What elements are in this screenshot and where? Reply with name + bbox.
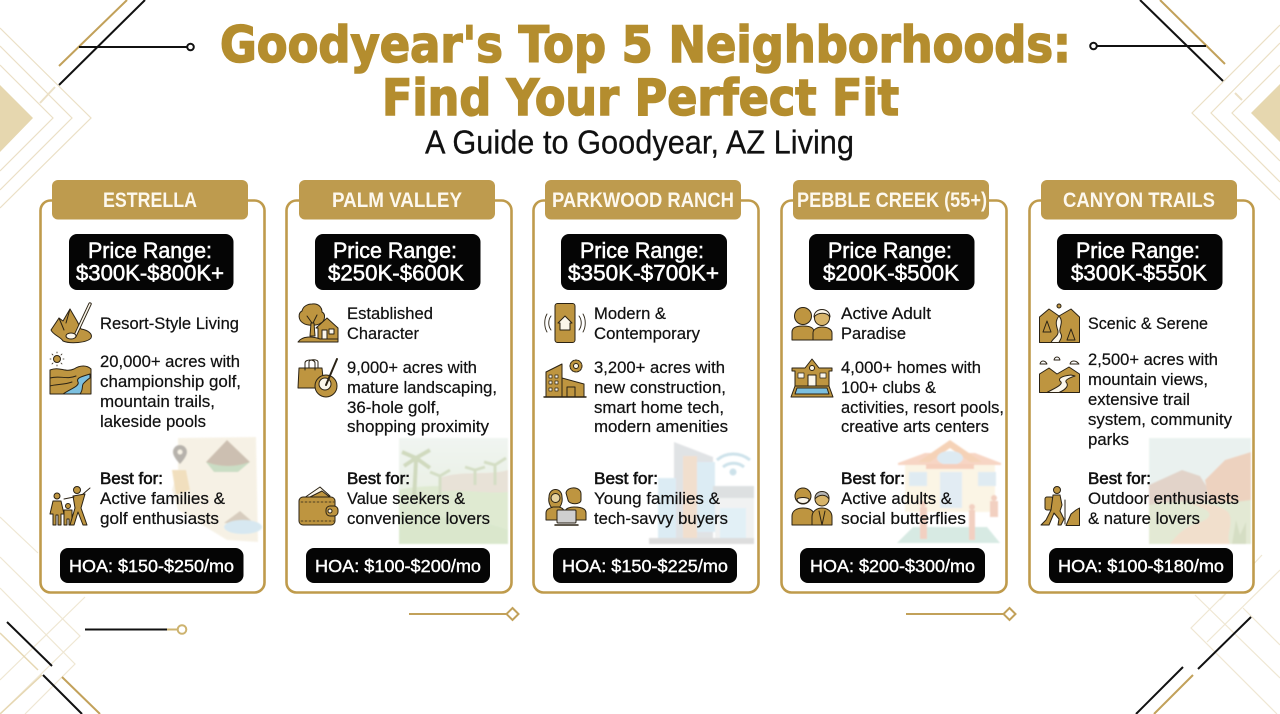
price range badge <box>69 234 234 290</box>
feature text: acreage and trails: parks <box>1088 430 1129 449</box>
best-for text: Active adults & <box>841 489 953 508</box>
HOA badge: HOA: $100-$180/mo <box>1058 556 1224 576</box>
feature text: homes and clubs: creative arts centers <box>841 417 989 436</box>
best-for text: Best for: <box>100 469 163 488</box>
best-for text: convenience lovers <box>347 509 490 528</box>
HOA badge <box>306 548 490 583</box>
heading pill: Canyon Trails: CANYON TRAILS <box>1063 188 1215 212</box>
best-for text <box>347 469 490 528</box>
HOA badge: HOA: $200-$300/mo <box>810 556 975 576</box>
title: Find Your Perfect Fit <box>382 69 899 127</box>
feature text: established character: Character <box>347 324 419 343</box>
price range badge: Price Range: <box>88 238 212 263</box>
best-for text: social butterflies <box>841 509 966 528</box>
illustration: clubhouse watermark <box>897 440 1001 543</box>
best-for text: Best for: <box>347 469 410 488</box>
best-for text: Young families & <box>594 489 721 508</box>
illustration: canyon landscape watermark <box>1149 438 1251 544</box>
icon: golfing family <box>50 486 90 525</box>
feature text: acreage and amenities: smart home tech, <box>594 398 724 417</box>
illustration: palm golf course watermark <box>399 438 508 544</box>
feature text: established character: Established <box>347 304 433 323</box>
icon: shopping bag and golf <box>298 359 337 397</box>
decoration: lower centre-left connector <box>409 608 518 620</box>
icon: wallet <box>299 487 338 525</box>
feature text: acreage and amenities: 3,200+ acres with <box>594 358 725 377</box>
feature text: acreage and amenities: mountain trails, <box>100 392 215 411</box>
feature text: modern and contemporary: Modern & <box>594 304 667 323</box>
best-for text: golf enthusiasts <box>100 509 219 528</box>
icon: golf mountains <box>51 304 91 343</box>
best-for text: Value seekers & <box>347 489 466 508</box>
icon: clouds and mountain path <box>1040 357 1080 392</box>
illustration: modern house with wifi watermark <box>649 442 754 544</box>
title <box>220 16 1071 127</box>
icon: tree and house <box>298 304 338 342</box>
decoration: bottom-right corner <box>1136 555 1280 714</box>
decoration: bottom-left corner <box>0 517 186 714</box>
feature text: acreage and amenities: lakeside pools <box>100 412 206 431</box>
feature text: active adult paradise <box>841 304 931 343</box>
feature text: acreage and amenities: shopping proximity <box>347 417 489 436</box>
best-for text: tech-savvy buyers <box>594 509 728 528</box>
heading pill: Palm Valley: PALM VALLEY <box>332 188 462 212</box>
price range badge: Price Range: <box>1076 238 1200 263</box>
HOA badge <box>60 548 244 583</box>
feature text: acreage and amenities: 20,000+ acres with <box>100 352 240 371</box>
feature text: homes and clubs: activities, resort pools, <box>841 398 1004 417</box>
best-for text <box>1088 469 1239 528</box>
decoration: lower centre-right connector <box>906 608 1016 620</box>
feature text: acreage and amenities: championship golf, <box>100 372 241 391</box>
icon: active adult couple <box>792 308 832 340</box>
icon: young couple with laptop <box>546 488 586 525</box>
heading pill: Estrella <box>52 180 248 220</box>
feature text: established character <box>347 304 433 343</box>
icon: scenic trail <box>1040 304 1080 342</box>
best-for text: Best for: <box>841 469 905 488</box>
feature text: acreage and amenities <box>100 352 241 431</box>
feature text: acreage and trails: 2,500+ acres with <box>1088 350 1218 369</box>
feature text: modern and contemporary: Contemporary <box>594 324 700 343</box>
feature text: acreage and amenities <box>347 358 497 436</box>
icon: clubhouse and pool <box>791 359 833 397</box>
heading pill: Pebble Creek: PEBBLE CREEK (55+) <box>797 188 987 212</box>
price range badge: $250K-$600K <box>328 260 464 286</box>
best-for text <box>841 469 966 528</box>
icon: smart home phone <box>545 304 585 342</box>
panel: Canyon Trails <box>1030 180 1254 592</box>
best-for text: Active families & <box>100 489 226 508</box>
heading pill: Parkwood Ranch <box>545 180 741 220</box>
HOA badge <box>1049 548 1233 583</box>
feature text: active adult paradise: Paradise <box>841 324 906 343</box>
price range badge: Price Range: <box>580 238 704 263</box>
feature text: acreage and amenities: 9,000+ acres with <box>347 358 477 377</box>
panel: Pebble Creek <box>782 180 1006 592</box>
decoration: top-left corner <box>0 0 194 208</box>
heading pill: Pebble Creek <box>793 180 989 220</box>
feature text: acreage and amenities: modern amenities <box>594 417 728 436</box>
HOA badge: HOA: $100-$200/mo <box>315 556 481 576</box>
feature text: acreage and amenities: mature landscaping, <box>347 378 497 397</box>
panel: Parkwood Ranch <box>534 180 758 592</box>
panel: Estrella <box>40 180 264 592</box>
best-for text: Best for: <box>594 469 658 488</box>
feature text: homes and clubs: 4,000+ homes with <box>841 358 981 377</box>
heading pill: Parkwood Ranch: PARKWOOD RANCH <box>552 188 734 212</box>
best-for text: Best for: <box>1088 469 1151 488</box>
icon: senior couple <box>792 488 832 525</box>
price range badge: $300K-$550K <box>1071 260 1207 286</box>
price range badge <box>809 234 974 290</box>
HOA badge: HOA: $150-$250/mo <box>69 556 234 576</box>
heading pill: Canyon Trails <box>1041 180 1237 220</box>
price range badge: $350K-$700K+ <box>568 260 719 286</box>
price range badge: $300K-$800K+ <box>76 260 224 286</box>
price range badge <box>1057 234 1222 290</box>
feature text: acreage and trails: system, community <box>1088 410 1232 429</box>
best-for text <box>594 469 728 528</box>
feature text: resort-style living: Resort-Style Living <box>100 314 239 333</box>
price range badge: Price Range: <box>828 238 952 263</box>
feature text: acreage and trails: extensive trail <box>1088 390 1190 409</box>
feature text: modern and contemporary <box>594 304 700 343</box>
feature text: homes and clubs: 100+ clubs & <box>841 378 937 397</box>
HOA badge <box>553 548 737 583</box>
best-for text: & nature lovers <box>1088 509 1200 528</box>
panel: Palm Valley <box>286 180 512 592</box>
best-for text: Outdoor enthusiasts <box>1088 489 1239 508</box>
feature text: scenic and serene: Scenic & Serene <box>1088 314 1208 333</box>
illustration: Arizona map watermark <box>172 437 262 542</box>
best-for text <box>100 469 226 528</box>
feature text: homes and clubs <box>841 358 1004 436</box>
feature text: acreage and trails: mountain views, <box>1088 370 1208 389</box>
price range badge: Price Range: <box>333 238 457 263</box>
icon: hiker <box>1041 486 1080 526</box>
HOA badge <box>800 548 985 583</box>
price range badge <box>315 234 480 290</box>
price range badge <box>561 234 727 290</box>
HOA badge: HOA: $150-$225/mo <box>562 556 728 576</box>
icon: modern buildings and gear <box>544 360 586 397</box>
feature text: acreage and amenities: new construction, <box>594 378 726 397</box>
feature text: acreage and amenities: 36-hole golf, <box>347 398 440 417</box>
heading pill: Estrella: ESTRELLA <box>103 188 197 212</box>
decoration: top-right corner <box>1090 0 1280 200</box>
price range badge: $200K-$500K <box>823 260 959 286</box>
icon: sun and river <box>50 352 91 394</box>
feature text: acreage and amenities <box>594 358 728 436</box>
feature text: acreage and trails <box>1088 350 1232 449</box>
heading pill: Palm Valley <box>299 180 495 220</box>
subtitle: A Guide to Goodyear, AZ Living <box>425 124 854 160</box>
title: Goodyear's Top 5 Neighborhoods: <box>220 16 1071 74</box>
feature text: active adult paradise: Active Adult <box>841 304 931 323</box>
